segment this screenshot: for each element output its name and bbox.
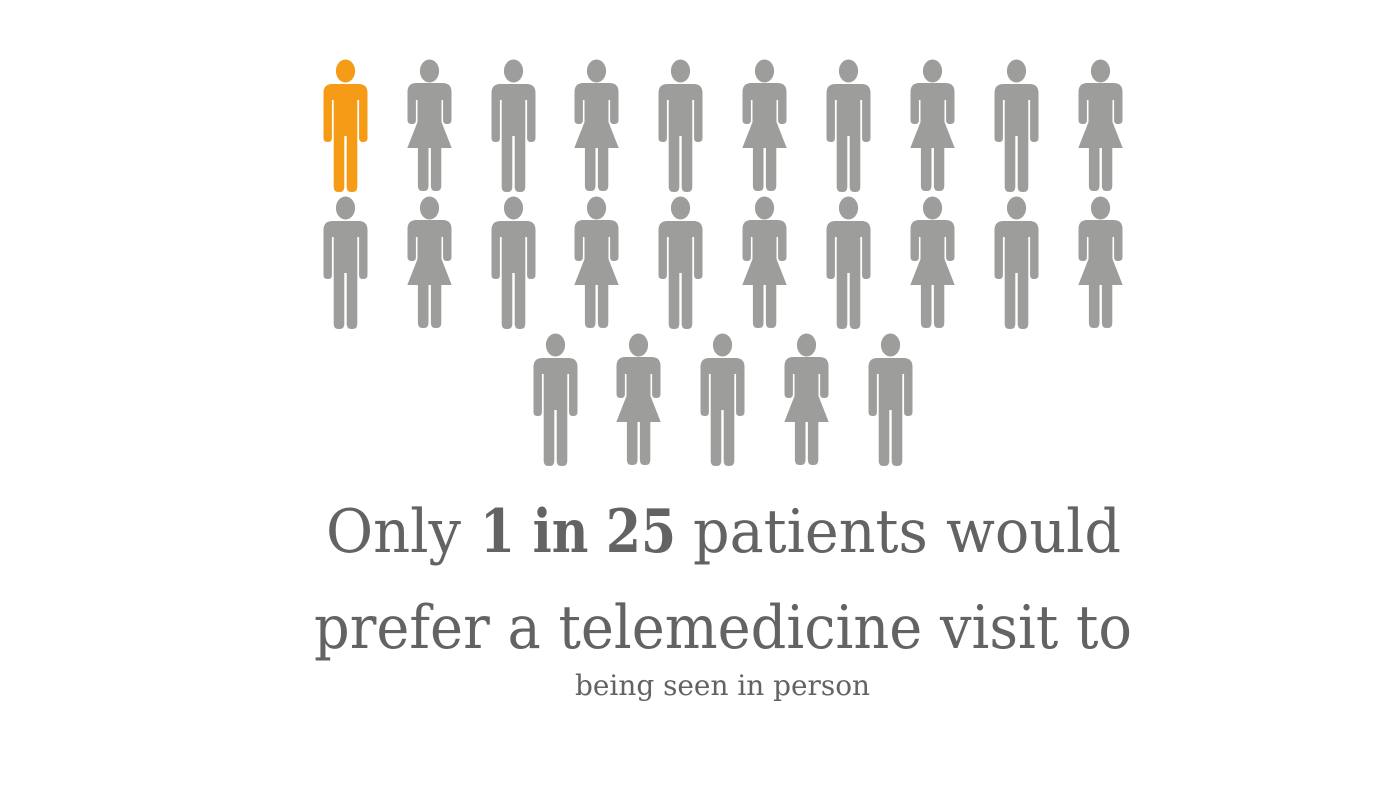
headline line 1: Only xyxy=(326,497,461,567)
subheading: being seen in person xyxy=(575,669,870,702)
icon: highlighted patient xyxy=(324,60,368,192)
row 2 of patients xyxy=(324,196,1123,329)
headline line 1 xyxy=(326,497,1121,567)
row 1 of patients xyxy=(407,60,1123,192)
row 3 of patients xyxy=(534,334,912,466)
headline line 1: patients would xyxy=(693,497,1121,567)
headline line 1: 1 in 25 xyxy=(480,497,676,567)
headline line 2: prefer a telemedicine visit to xyxy=(314,593,1132,663)
pictogram: 25 patients xyxy=(324,60,1123,466)
